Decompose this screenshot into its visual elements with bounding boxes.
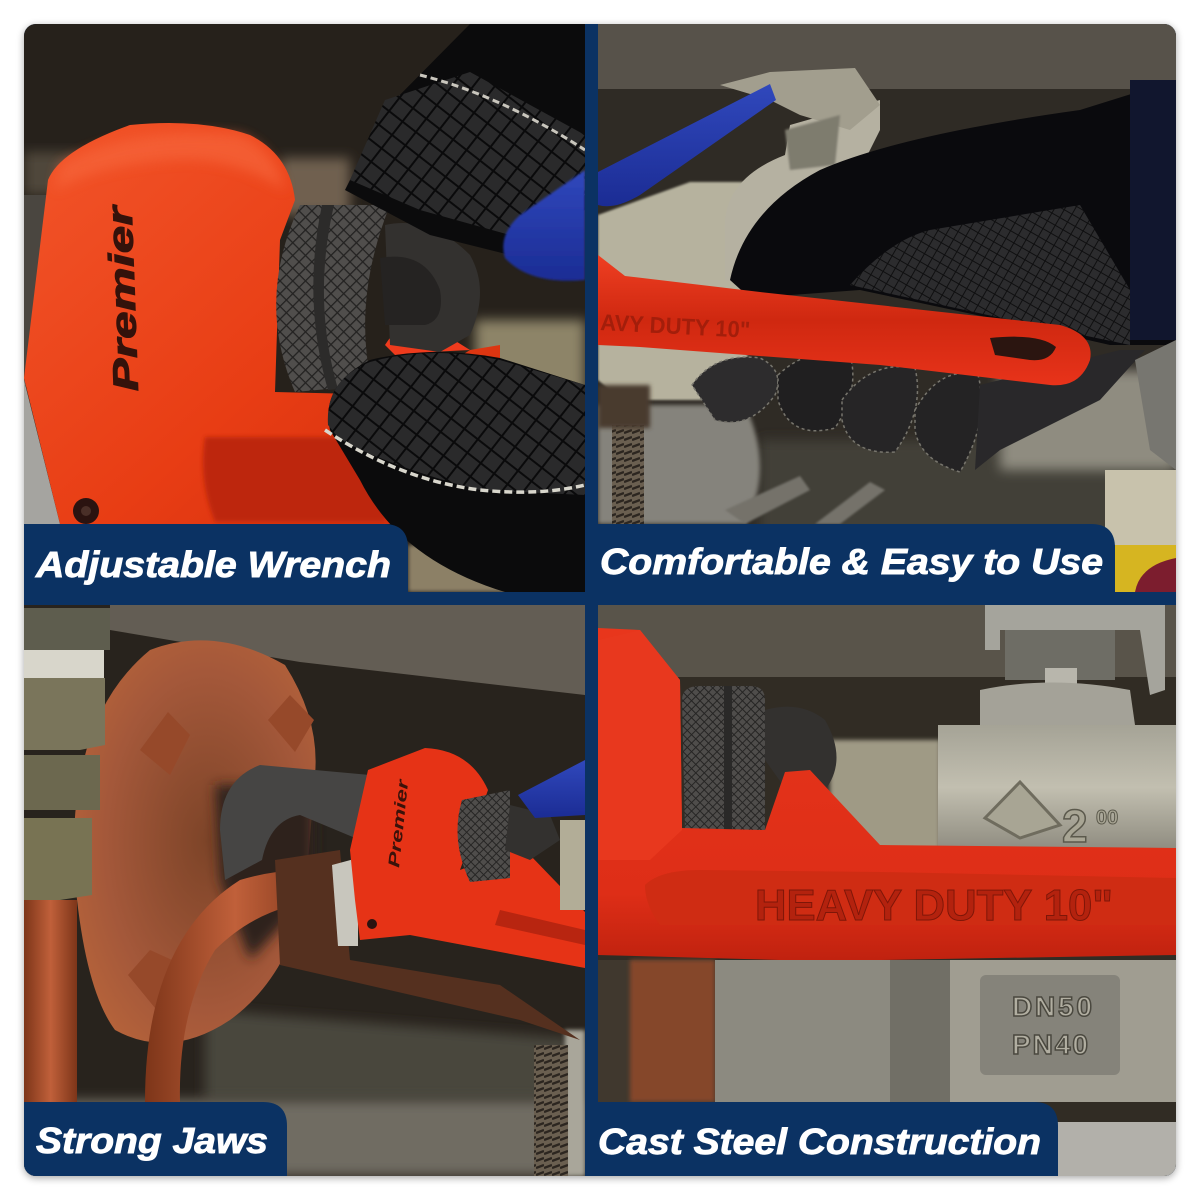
fittings and pipes: [24, 608, 580, 1176]
panel: strong jaws photo: [24, 605, 585, 1176]
small wrench: Premier: [386, 778, 412, 868]
black glove and fingers: [692, 80, 1176, 472]
large wrench: HEAVY DUTY 10": [755, 881, 1113, 930]
knurled jaw nut: [276, 205, 480, 392]
rusty flange: [74, 640, 316, 1043]
blue lever: [598, 84, 776, 206]
silver valve body: PN40: [1012, 1029, 1088, 1060]
wrench head: [24, 123, 500, 552]
silver valve body: 2: [1062, 800, 1088, 852]
large wrench: [598, 628, 1176, 960]
red wrench handle: AVY DUTY 10": [600, 309, 751, 343]
silver valve body: [715, 605, 1176, 1176]
blue handle: [503, 170, 585, 281]
label: Strong Jaws: Strong Jaws: [36, 1120, 268, 1161]
label: Strong Jaws: [24, 1102, 287, 1176]
silver valve body: DN50: [1012, 991, 1092, 1022]
small wrench: [220, 748, 585, 968]
label: Adjustable Wrench: [24, 524, 408, 592]
upper glove: [345, 24, 585, 255]
silver valve body: 00: [1096, 807, 1118, 829]
label: Comfortable & Easy to Use: [598, 524, 1115, 592]
red wrench handle: [598, 255, 1091, 385]
wrench brand text: Premier: [100, 202, 146, 392]
lower glove: [325, 352, 585, 592]
panel: adjustable wrench photo: [24, 24, 585, 592]
label: Cast Steel Construction: [598, 1102, 1058, 1176]
label: Cast Steel Construction: Cast Steel Construction: [598, 1121, 1041, 1162]
label: Adjustable Wrench: Adjustable Wrench: [35, 544, 391, 585]
label: Comfortable & Easy to Use: Comfortable & Easy to Use: [600, 541, 1103, 582]
panel: comfortable grip photo: [598, 24, 1176, 592]
panel: cast steel construction photo: [598, 605, 1176, 1176]
